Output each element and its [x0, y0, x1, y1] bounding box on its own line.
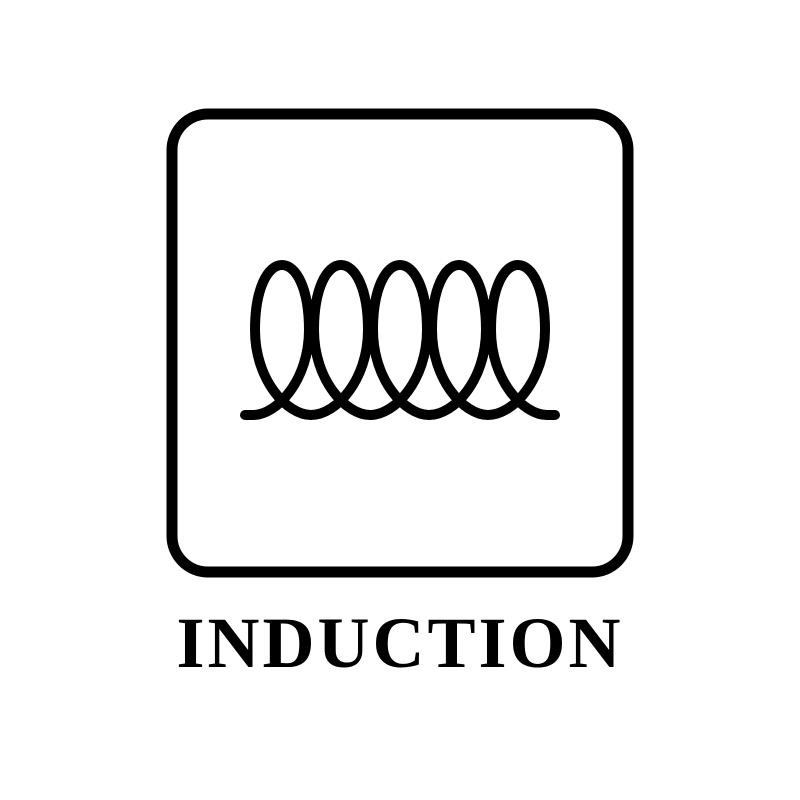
icon: induction coil — [245, 265, 555, 415]
icon frame: rounded square — [172, 114, 628, 572]
label: INDUCTION: INDUCTION — [176, 603, 624, 683]
